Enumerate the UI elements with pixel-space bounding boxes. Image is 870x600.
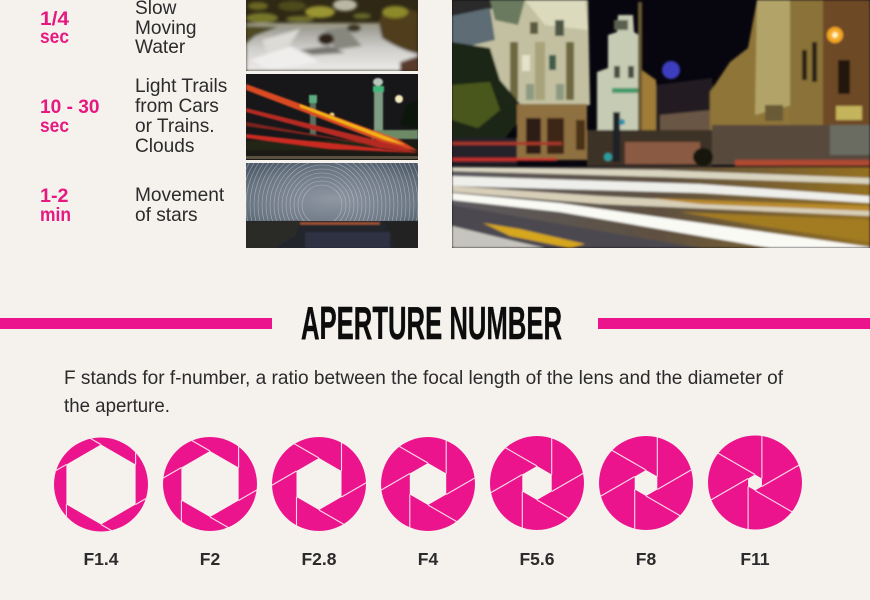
left building	[472, 0, 592, 107]
section heading: aperture number	[0, 297, 870, 349]
time label: 10 - 30 sec: sec	[40, 116, 69, 137]
aperture labels: F8	[636, 549, 656, 569]
text block: f-number explanation: the aperture.	[64, 395, 170, 417]
aperture labels: F11	[740, 549, 770, 569]
road	[452, 167, 870, 248]
aperture icon: F5.6	[490, 436, 584, 530]
aperture labels: F1.4	[83, 549, 119, 569]
description: slow moving water: Water	[135, 37, 186, 58]
aperture icon: F11	[708, 436, 802, 530]
photo: light trails at mosque	[246, 74, 418, 160]
photo: waterfall	[246, 0, 418, 71]
row: 10-30 sec light trails	[40, 74, 418, 160]
time label: 1-2 min: 1-2	[40, 186, 68, 207]
aperture icon: F1.4	[54, 438, 148, 532]
central tower	[597, 15, 640, 140]
aperture labels: F2.8	[301, 549, 337, 569]
aperture labels	[83, 549, 770, 569]
row: 1/4 sec slow moving water	[40, 0, 418, 71]
section heading: aperture number: APERTURE NUMBER	[301, 297, 562, 349]
aperture labels: F2	[200, 549, 220, 569]
description: light trails: from Cars	[135, 96, 219, 117]
street level	[452, 138, 517, 165]
time label: 1/4 sec: 1/4	[40, 9, 69, 30]
aperture icon: F8	[599, 436, 693, 530]
time label: 1/4 sec: sec	[40, 27, 69, 48]
aperture chart	[54, 436, 802, 569]
photo: city street long exposure	[452, 0, 870, 248]
description: movement of stars: of stars	[135, 205, 198, 226]
photo: star trails	[246, 163, 418, 248]
row: 1-2 min movement of stars	[41, 163, 418, 248]
text block: f-number explanation: F stands for f-number, a ratio between the focal length of the lens and the diameter of	[64, 367, 784, 389]
description: movement of stars: Movement	[135, 185, 225, 206]
time label: 1-2 min: min	[40, 205, 71, 226]
aperture icon: F2.8	[271, 437, 367, 531]
description: slow moving water: Moving	[135, 18, 197, 39]
description: light trails: or Trains.	[135, 116, 215, 137]
description: light trails: Clouds	[135, 136, 194, 157]
aperture labels: F4	[418, 549, 438, 569]
panel: shutter speed table	[40, 0, 418, 248]
right buildings	[708, 1, 792, 131]
aperture icon: F4	[381, 437, 475, 531]
aperture icon: F2	[163, 437, 257, 531]
time label: 10 - 30 sec: 10 - 30	[40, 97, 100, 118]
description: light trails: Light Trails	[135, 76, 227, 97]
aperture labels: F5.6	[519, 549, 555, 569]
